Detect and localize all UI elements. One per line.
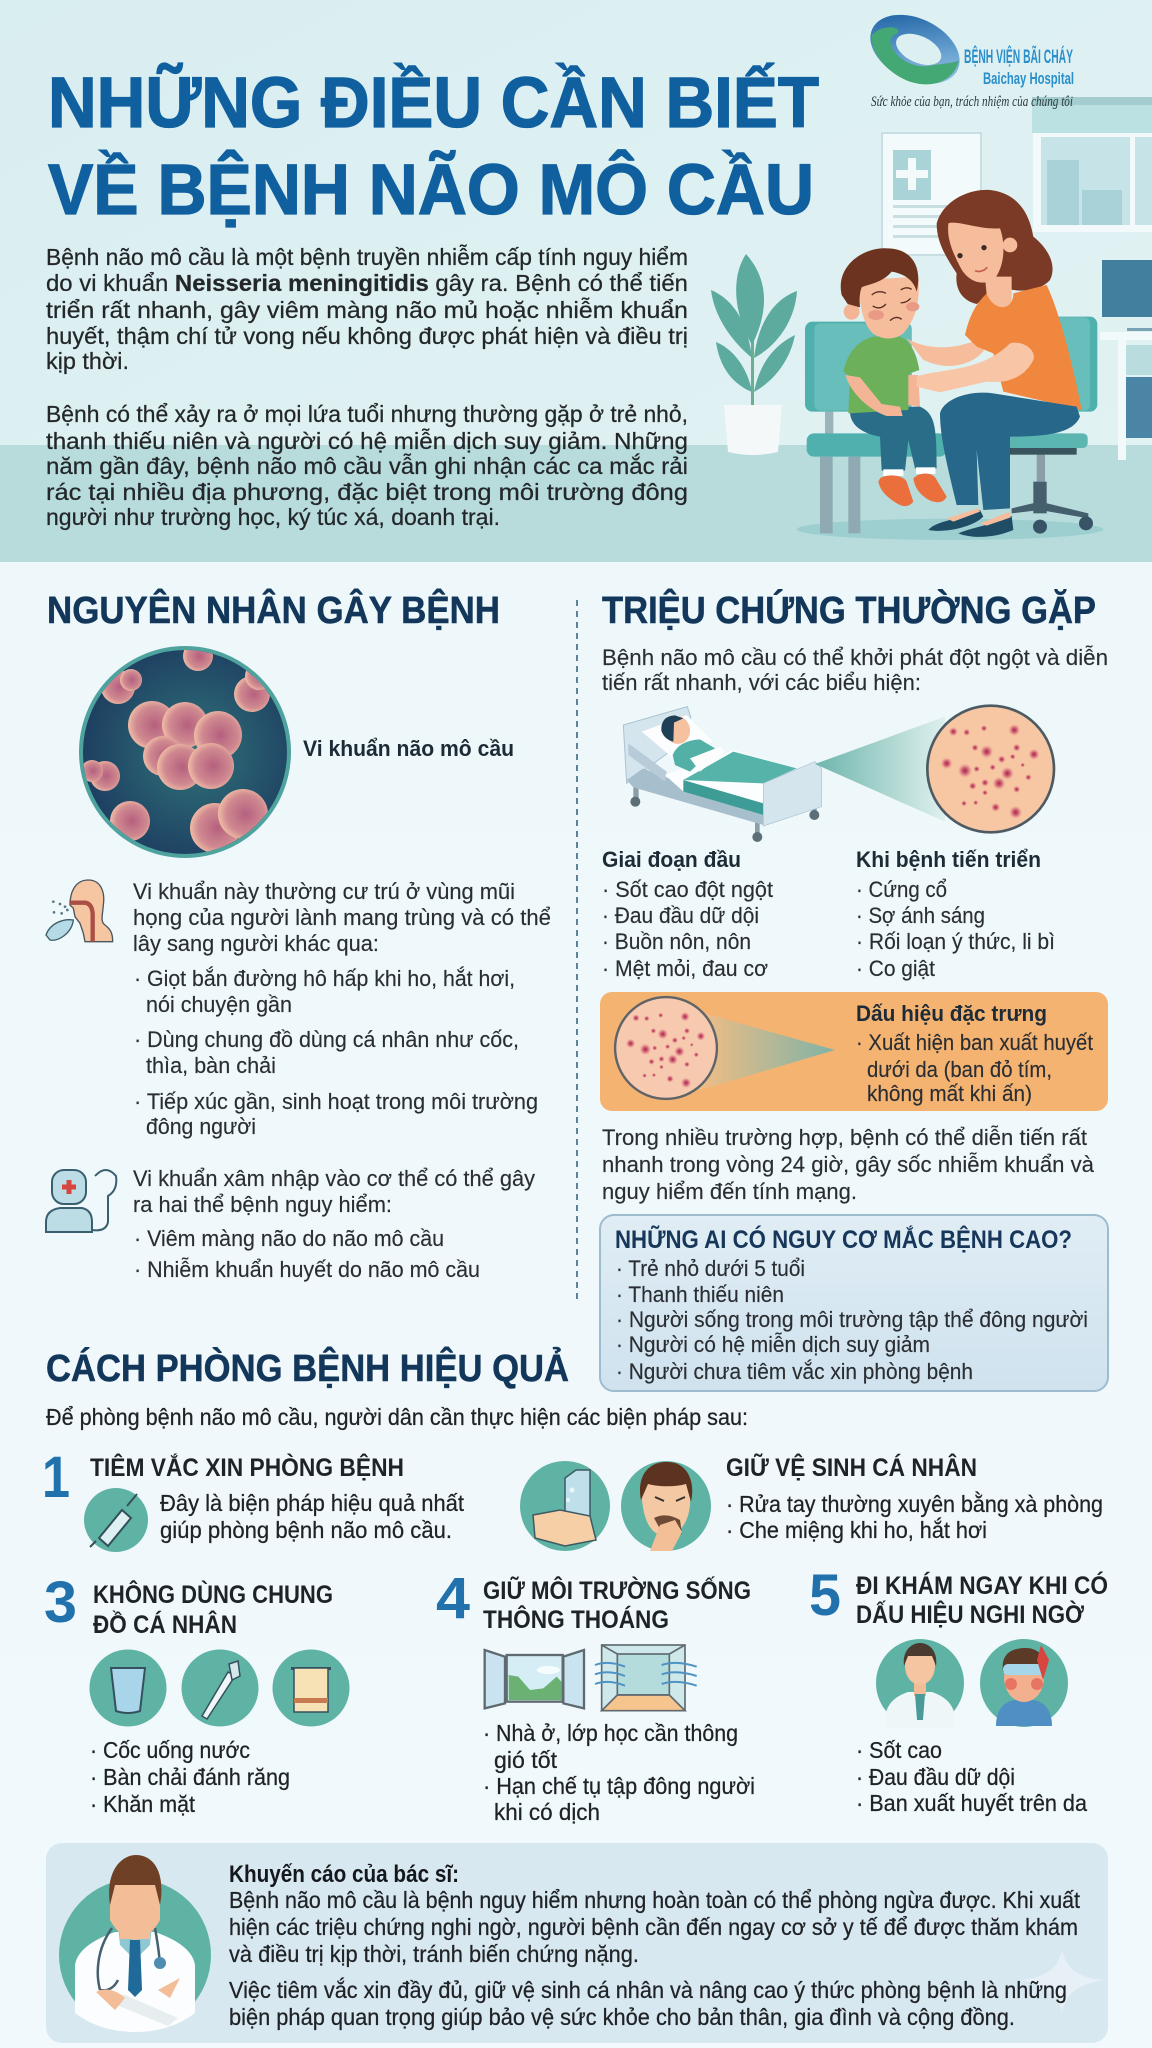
icon: syringe <box>84 1488 148 1552</box>
callout: characteristic sign: Dấu hiệu đặc trưng <box>856 1001 1047 1026</box>
progression list: Khi bệnh tiến triển <box>856 847 1041 872</box>
panel: high risk groups <box>600 1215 1108 1391</box>
step 3: no sharing: · Cốc uống nước <box>90 1737 250 1763</box>
icon: sick child <box>980 1639 1068 1727</box>
recommendation text: Bệnh não mô cầu là bệnh nguy hiểm nhưng hoàn toàn có thể phòng ngừa được. Khi xuất <box>229 1887 1081 1913</box>
step 4: ventilated environment: · Nhà ở, lớp học cần thông <box>483 1720 738 1746</box>
panel: doctor recommendation <box>46 1843 1108 2043</box>
panel: high risk groups: · Trẻ nhỏ dưới 5 tuổi <box>616 1256 805 1281</box>
panel: high risk groups: · Người chưa tiêm vắc xin phòng bệnh <box>616 1359 973 1384</box>
step 5: see a doctor: ĐI KHÁM NGAY KHI CÓ <box>856 1570 1108 1600</box>
step 1: vaccine: Đây là biện pháp hiệu quả nhất <box>160 1490 465 1516</box>
intro paragraph 1: do vi khuẩn Neisseria meningitidis gây ra. Bệnh có thể tiến <box>46 270 688 296</box>
text: transmission <box>133 879 551 1139</box>
icon: ventilated room <box>595 1645 697 1711</box>
background: poster <box>882 133 981 255</box>
step 1: vaccine <box>42 1445 465 1552</box>
background: desk and monitor <box>1100 260 1152 460</box>
panel: causes <box>46 588 551 1282</box>
step 4: ventilated environment: · Hạn chế tụ tập đông người <box>483 1773 755 1799</box>
recommendation text <box>229 1861 1081 2030</box>
icon: person coughing <box>621 1461 711 1551</box>
text: disease forms: Vi khuẩn xâm nhập vào cơ thể có thể gây <box>133 1166 535 1191</box>
step 4: ventilated environment: 4 <box>436 1566 470 1631</box>
header panel <box>0 0 1152 562</box>
title: VỀ BỆNH NÃO MÔ CẦU <box>48 150 814 230</box>
icon: glass <box>90 1650 166 1726</box>
recommendation text: biện pháp quan trọng giúp bảo vệ sức khỏe cho bản thân, gia đình và cộng đồng. <box>229 2004 1015 2030</box>
icon: throat and droplets <box>46 880 113 942</box>
intro paragraph 1 <box>46 244 688 374</box>
text: disease forms: · Nhiễm khuẩn huyết do não mô cầu <box>134 1257 480 1282</box>
panel: high risk groups: NHỮNG AI CÓ NGUY CƠ MẮC BỆNH CAO? <box>615 1224 1072 1254</box>
intro paragraph 1: triển rất nhanh, gây viêm màng não mủ hoặc nhiễm khuẩn <box>46 297 688 323</box>
step 1: vaccine: TIÊM VẮC XIN PHÒNG BỆNH <box>90 1452 404 1482</box>
step 2: personal hygiene: · Rửa tay thường xuyên bằng xà phòng <box>726 1491 1103 1517</box>
progression list: · Cứng cổ <box>856 877 947 902</box>
intro paragraph 1: huyết, thậm chí tử vong nếu không được phát hiện và điều trị <box>46 323 688 349</box>
severity text <box>602 1125 1095 1204</box>
text: transmission: đông người <box>146 1114 256 1139</box>
step 3: no sharing: · Bàn chải đánh răng <box>90 1764 290 1790</box>
step 5: see a doctor: · Đau đầu dữ dội <box>856 1764 1015 1790</box>
step 5: see a doctor: · Sốt cao <box>856 1737 942 1763</box>
step 5: see a doctor: 5 <box>809 1563 841 1628</box>
icon: doctor <box>876 1639 964 1728</box>
heading: symptoms: TRIỆU CHỨNG THƯỜNG GẶP <box>602 588 1096 632</box>
text: transmission: thìa, bàn chải <box>146 1053 276 1078</box>
progression list <box>856 847 1055 981</box>
intro paragraph 1: kịp thời. <box>46 348 129 374</box>
panel: high risk groups: · Người sống trong môi trường tập thể đông người <box>616 1307 1088 1332</box>
callout beam <box>700 1012 835 1090</box>
rash small <box>615 997 717 1099</box>
early stage list: Giai đoạn đầu <box>602 847 741 872</box>
magnifying beam <box>815 717 945 822</box>
logo slogan: Sức khỏe của bạn, trách nhiệm của chúng tôi <box>871 94 1073 110</box>
step 5: see a doctor <box>809 1563 1108 1816</box>
text: disease forms: · Viêm màng não do não mô cầu <box>134 1226 444 1251</box>
mother <box>907 190 1082 537</box>
symptoms intro: tiến rất nhanh, với các biểu hiện: <box>602 670 921 695</box>
bacteria label: Vi khuẩn não mô cầu <box>303 736 514 761</box>
progression list: · Sợ ánh sáng <box>856 903 985 928</box>
step 4: ventilated environment: khi có dịch <box>494 1799 600 1825</box>
step 4: ventilated environment: GIỮ MÔI TRƯỜNG SỐNG <box>483 1575 751 1605</box>
icon: hand washing <box>520 1461 610 1551</box>
step 2: personal hygiene <box>520 1452 1103 1551</box>
step 1: vaccine: giúp phòng bệnh não mô cầu. <box>160 1517 452 1543</box>
rash close-up <box>927 706 1054 832</box>
panel: high risk groups: · Thanh thiếu niên <box>616 1282 784 1307</box>
intro paragraph 2: Bệnh có thể xảy ra ở mọi lứa tuổi nhưng thường gặp ở trẻ nhỏ, <box>46 401 688 427</box>
title <box>48 64 819 230</box>
callout: characteristic sign <box>600 992 1108 1111</box>
step 2: personal hygiene: · Che miệng khi ho, hắt hơi <box>726 1517 987 1543</box>
text: disease forms <box>133 1166 535 1282</box>
sparkle <box>1020 1950 1104 2012</box>
title: NHỮNG ĐIỀU CẦN BIẾT <box>48 64 819 143</box>
progression list: · Co giật <box>856 956 935 981</box>
early stage list: · Mệt mỏi, đau cơ <box>602 956 768 981</box>
recommendation text: và điều trị kịp thời, tránh biến chứng nặng. <box>229 1941 639 1967</box>
plant <box>711 254 797 455</box>
illustration: patient in bed and rash magnified <box>623 706 1054 842</box>
early stage list: · Sốt cao đột ngột <box>602 877 773 902</box>
early stage list: · Đau đầu dữ dội <box>602 903 759 928</box>
panel: prevention <box>42 1346 1108 1825</box>
bed <box>623 707 822 842</box>
step 5: see a doctor: DẤU HIỆU NGHI NGỜ <box>856 1599 1085 1629</box>
text: transmission: họng của người lành mang trùng và có thể <box>133 905 551 930</box>
text: transmission: · Dùng chung đồ dùng cá nhân như cốc, <box>134 1027 519 1052</box>
step 4: ventilated environment <box>436 1566 755 1825</box>
text: disease forms: ra hai thể bệnh nguy hiểm: <box>133 1192 392 1217</box>
step 5: see a doctor: · Ban xuất huyết trên da <box>856 1790 1087 1816</box>
text: transmission: lây sang người khác qua: <box>133 931 379 956</box>
severity text: nhanh trong vòng 24 giờ, gây sốc nhiễm khuẩn và <box>602 1152 1095 1177</box>
step 4: ventilated environment: gió tốt <box>494 1747 558 1773</box>
step 3: no sharing: · Khăn mặt <box>90 1791 196 1817</box>
icon: open window <box>485 1650 584 1708</box>
panel: high risk groups: · Người có hệ miễn dịch suy giảm <box>616 1332 930 1357</box>
progression list: · Rối loạn ý thức, li bì <box>856 929 1055 954</box>
chair <box>805 317 1097 534</box>
illustration: mother and child at clinic <box>797 190 1103 540</box>
icon: towel <box>272 1650 350 1726</box>
intro paragraph 2: rác tại nhiều địa phương, đặc biệt trong môi trường đông <box>46 479 688 505</box>
bacteria image <box>81 641 289 856</box>
logo swirl <box>859 1 971 98</box>
divider <box>576 600 578 1302</box>
step 4: ventilated environment: THÔNG THOÁNG <box>483 1604 669 1634</box>
child <box>841 248 947 506</box>
intro paragraph 2: thanh thiếu niên và người có hệ miễn dịch suy giảm. Những <box>46 428 688 454</box>
step 3: no sharing <box>44 1570 350 1817</box>
text: transmission: · Giọt bắn đường hô hấp khi ho, hắt hơi, <box>134 966 515 991</box>
panel: symptoms <box>600 588 1108 1391</box>
early stage list <box>602 847 773 981</box>
intro paragraph 1: Bệnh não mô cầu là một bệnh truyền nhiễm cấp tính nguy hiểm <box>46 244 688 270</box>
early stage list: · Buồn nôn, nôn <box>602 929 751 954</box>
heading: causes: NGUYÊN NHÂN GÂY BỆNH <box>47 588 500 632</box>
step 3: no sharing: KHÔNG DÙNG CHUNG <box>93 1579 333 1609</box>
text: transmission: Vi khuẩn này thường cư trú ở vùng mũi <box>133 879 515 904</box>
recommendation text: Khuyến cáo của bác sĩ: <box>229 1861 459 1888</box>
logo english name: Baichay Hospital <box>983 69 1074 88</box>
intro paragraph 2: người như trường học, ký túc xá, doanh trại. <box>46 504 500 530</box>
callout: characteristic sign: dưới da (ban đỏ tím, <box>867 1057 1052 1082</box>
symptoms intro: Bệnh não mô cầu có thể khởi phát đột ngột và diễn <box>602 645 1108 670</box>
recommendation text: hiện các triệu chứng nghi ngờ, người bệnh cần đến ngay cơ sở y tế để được thăm khám <box>229 1914 1078 1940</box>
severity text: Trong nhiều trường hợp, bệnh có thể diễn tiến rất <box>602 1125 1087 1150</box>
severity text: nguy hiểm đến tính mạng. <box>602 1179 857 1204</box>
intro paragraph 2: năm gần đây, bệnh não mô cầu vẫn ghi nhận các ca mắc rải <box>46 453 688 479</box>
background: clinic window <box>1032 97 1152 232</box>
callout: characteristic sign: không mất khi ấn) <box>867 1081 1032 1106</box>
intro paragraph 2 <box>46 401 688 530</box>
step 3: no sharing: 3 <box>44 1570 77 1635</box>
callout: characteristic sign: · Xuất hiện ban xuất huyết <box>856 1030 1093 1055</box>
hospital logo <box>859 1 1074 110</box>
step 1: vaccine: 1 <box>42 1445 70 1510</box>
doctor portrait <box>59 1855 211 2032</box>
icon: doctor with stethoscope <box>46 1170 116 1232</box>
text: transmission: nói chuyện gần <box>146 992 292 1017</box>
icon: toothbrush <box>182 1650 258 1726</box>
heading: prevention: CÁCH PHÒNG BỆNH HIỆU QUẢ <box>46 1346 569 1390</box>
prevention intro: Để phòng bệnh não mô cầu, người dân cần thực hiện các biện pháp sau: <box>46 1404 748 1430</box>
symptoms intro <box>602 645 1108 695</box>
step 3: no sharing: ĐỒ CÁ NHÂN <box>93 1609 237 1639</box>
step 2: personal hygiene: GIỮ VỆ SINH CÁ NHÂN <box>726 1452 977 1482</box>
recommendation text: Việc tiêm vắc xin đầy đủ, giữ vệ sinh cá nhân và nâng cao ý thức phòng bệnh là những <box>229 1977 1067 2003</box>
text: transmission: · Tiếp xúc gần, sinh hoạt trong môi trường <box>134 1089 538 1114</box>
